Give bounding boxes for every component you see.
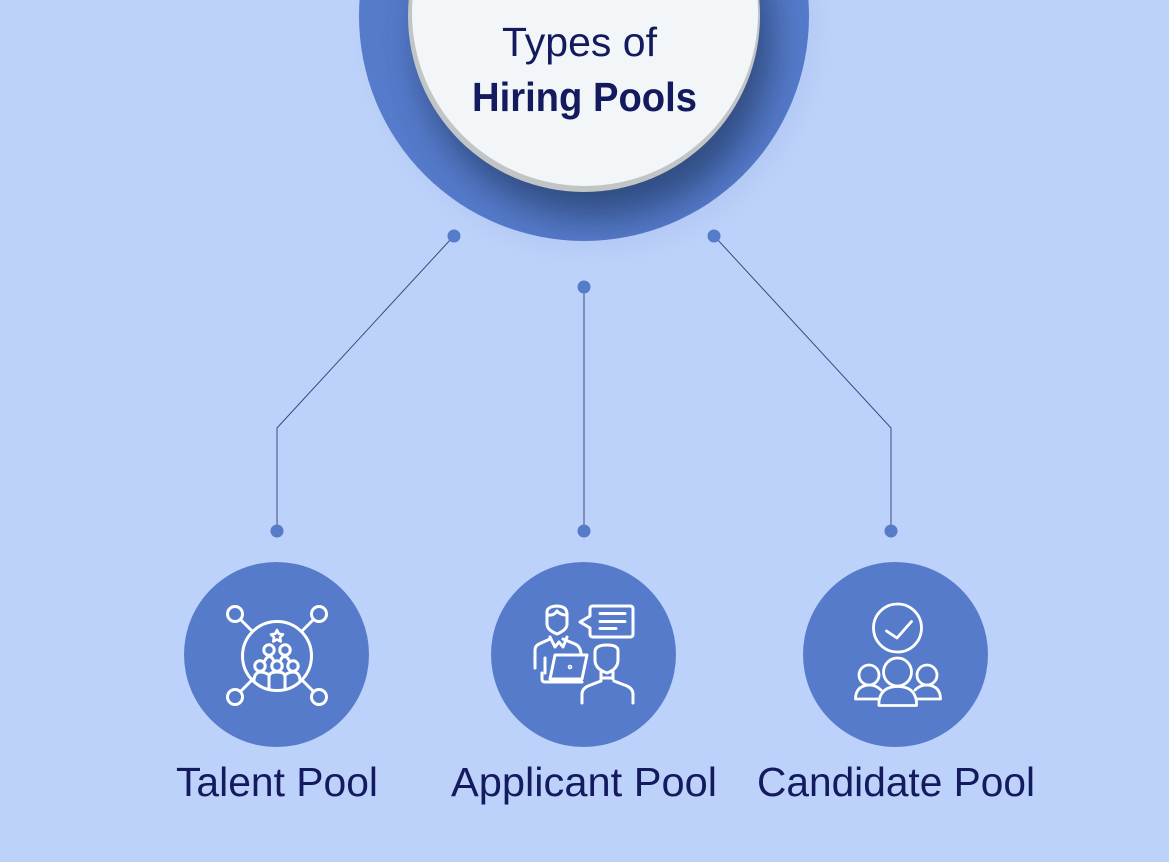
label: candidate pool: Candidate Pool (757, 759, 1035, 805)
infographic canvas (176, 0, 1032, 804)
icon: candidate pool group with check (803, 562, 988, 747)
connector: candidate pool (708, 230, 898, 538)
connector: applicant pool (578, 280, 590, 538)
title: Hiring Pools (472, 74, 697, 120)
label: applicant pool: Applicant Pool (451, 759, 717, 805)
title: Types of (502, 19, 658, 65)
icon: talent pool network (184, 562, 369, 747)
icon: applicant pool interview (491, 562, 676, 747)
label: talent pool: Talent Pool (176, 759, 378, 805)
connector: talent pool (270, 230, 460, 538)
header medallion (359, 0, 818, 252)
title (472, 19, 697, 120)
